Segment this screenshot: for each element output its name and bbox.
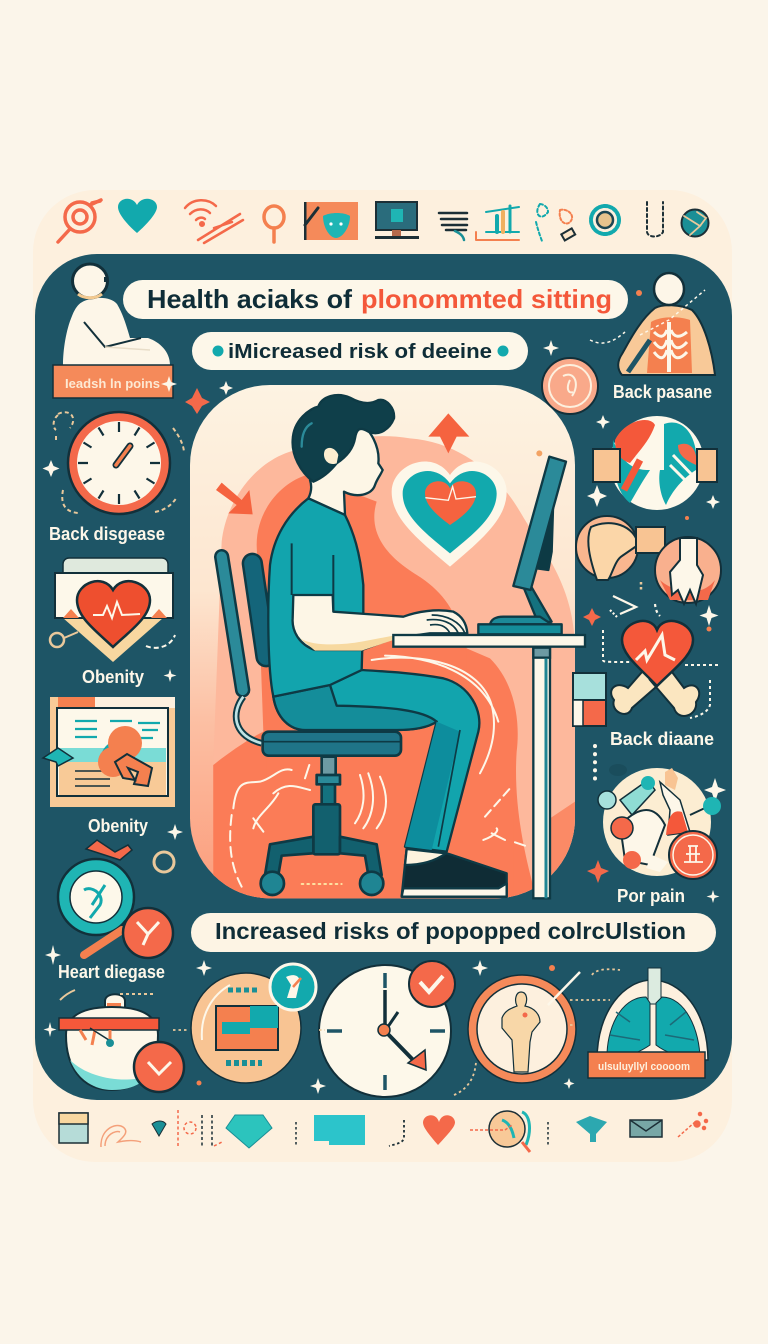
- icon: bar chart: [476, 206, 519, 240]
- badge: [270, 964, 316, 1010]
- icon: target: [58, 200, 101, 242]
- arm and hand: [293, 595, 467, 650]
- chair: [222, 557, 401, 895]
- dotted column: [593, 746, 597, 785]
- icon: dashed elbow: [389, 1120, 404, 1146]
- icon: cross badge: [123, 908, 173, 958]
- left box: [593, 449, 620, 482]
- icon: small card: [59, 1113, 88, 1143]
- icon: dotted U: [647, 202, 663, 236]
- icon: heart with pulse: [77, 581, 150, 647]
- hair: [293, 395, 394, 482]
- panel: heart card left: [50, 558, 175, 662]
- icon: teal heart: [118, 199, 157, 233]
- label text: Ieadsh ln poins: [65, 376, 160, 391]
- icon: magnifier: [264, 206, 284, 242]
- icon: orange square with mask: [304, 202, 358, 240]
- label: back disease right: Back diaane: [610, 729, 714, 749]
- panel: heart with bones: [603, 621, 719, 718]
- icon: dashed columns: [178, 1110, 222, 1148]
- heading pill: main title: [123, 280, 628, 319]
- panel: body circle: [468, 972, 580, 1083]
- icon: heart with pulse: [392, 461, 507, 567]
- panel: magnifier with teal disc: [58, 840, 174, 958]
- icon: coral diamond arrow: [428, 413, 469, 453]
- panel: document card left: [43, 697, 175, 807]
- connector dots: [173, 969, 620, 1095]
- icon: coral star left of panel: [185, 388, 210, 414]
- sparkles: [42, 340, 726, 1094]
- label box: [588, 1052, 705, 1078]
- icon: wifi and slashes: [185, 200, 243, 243]
- icon: anatomical disc: [470, 1111, 548, 1152]
- icon: globe: [682, 210, 708, 236]
- label: back disease: Back disgease: [49, 524, 165, 544]
- bottom icon row: [59, 1110, 708, 1152]
- icon: teal diamond: [43, 748, 73, 766]
- right box: [697, 449, 717, 482]
- icon: check badge: [134, 1042, 184, 1092]
- panel: seated person top left: [53, 264, 173, 398]
- heading pill: lower subtitle: [191, 913, 716, 952]
- figure: [63, 264, 170, 365]
- icon: teal gem: [226, 1115, 272, 1148]
- icon: teal drop: [152, 1121, 166, 1136]
- background blobs: [213, 436, 575, 898]
- icon: coral star lower right: [587, 860, 609, 883]
- label: back pain: Back pasane: [613, 382, 712, 402]
- shirt: [268, 498, 363, 697]
- dot: [536, 450, 542, 456]
- panel: rib figure top right: [590, 273, 715, 375]
- small box by desk: [573, 673, 606, 726]
- top icon row: [58, 199, 708, 243]
- icon: teal funnel: [576, 1116, 607, 1142]
- label: obesity 1: Obenity: [82, 667, 144, 687]
- badge: [669, 831, 717, 879]
- icon: coral heart: [423, 1115, 455, 1145]
- neck and face: [308, 415, 383, 515]
- panel: shoulder and hand circles: [576, 516, 721, 604]
- icon: gear: [591, 206, 619, 234]
- icon: dotted line: [295, 1122, 297, 1146]
- lower subtitle text: Increased risks of popopped colrcUlstion: [215, 918, 686, 944]
- icon: server stack: [439, 213, 467, 240]
- right lung: [656, 997, 700, 1060]
- icon: hand outline: [101, 1126, 141, 1147]
- coral dots: [196, 290, 712, 1086]
- icon: envelope: [630, 1120, 662, 1137]
- icon: monitor: [375, 202, 419, 239]
- panel: large clock: [319, 961, 455, 1097]
- subtitle text: iMicreased risk of deeine: [228, 341, 492, 363]
- label: pain: Por pain: [617, 886, 685, 906]
- icon: coral star right: [583, 608, 601, 626]
- shoe: [402, 848, 507, 897]
- arrow: coral pointer: [216, 483, 253, 514]
- label text: ulsuluyllyl coooom: [598, 1061, 690, 1073]
- title coral part: plonommted sitting: [361, 284, 612, 314]
- motion lines: [230, 656, 525, 887]
- person: [268, 395, 507, 897]
- badge: [409, 961, 455, 1007]
- icon: teal texture block: [314, 1115, 365, 1145]
- panel: central illustration: [190, 385, 585, 898]
- dashed accents: [610, 582, 660, 617]
- left lung: [607, 997, 650, 1060]
- panel: bag with check: [59, 990, 184, 1092]
- panel: joints circle: [598, 764, 721, 879]
- panel: clock left: [54, 412, 184, 514]
- panel: screen circle: [191, 964, 316, 1083]
- label: obesity 2: Obenity: [88, 816, 148, 836]
- icon: coral circle: [542, 358, 598, 414]
- label: heart disease: Heart diegase: [58, 962, 165, 982]
- heading pill: subtitle: [192, 332, 528, 370]
- title dark part: Health aciaks of: [147, 284, 352, 314]
- ear: [324, 448, 338, 464]
- label box: [53, 365, 173, 398]
- icon: dotted path: [536, 204, 575, 241]
- panel: anatomy circle: [593, 416, 717, 510]
- icon: coral dots: [678, 1112, 708, 1137]
- monitor: [478, 457, 566, 634]
- outer cream panel: [33, 190, 732, 1162]
- teal main panel: [35, 254, 732, 1100]
- desk: [393, 635, 585, 898]
- leg and trousers: [273, 670, 479, 852]
- panel: lungs: [588, 968, 708, 1078]
